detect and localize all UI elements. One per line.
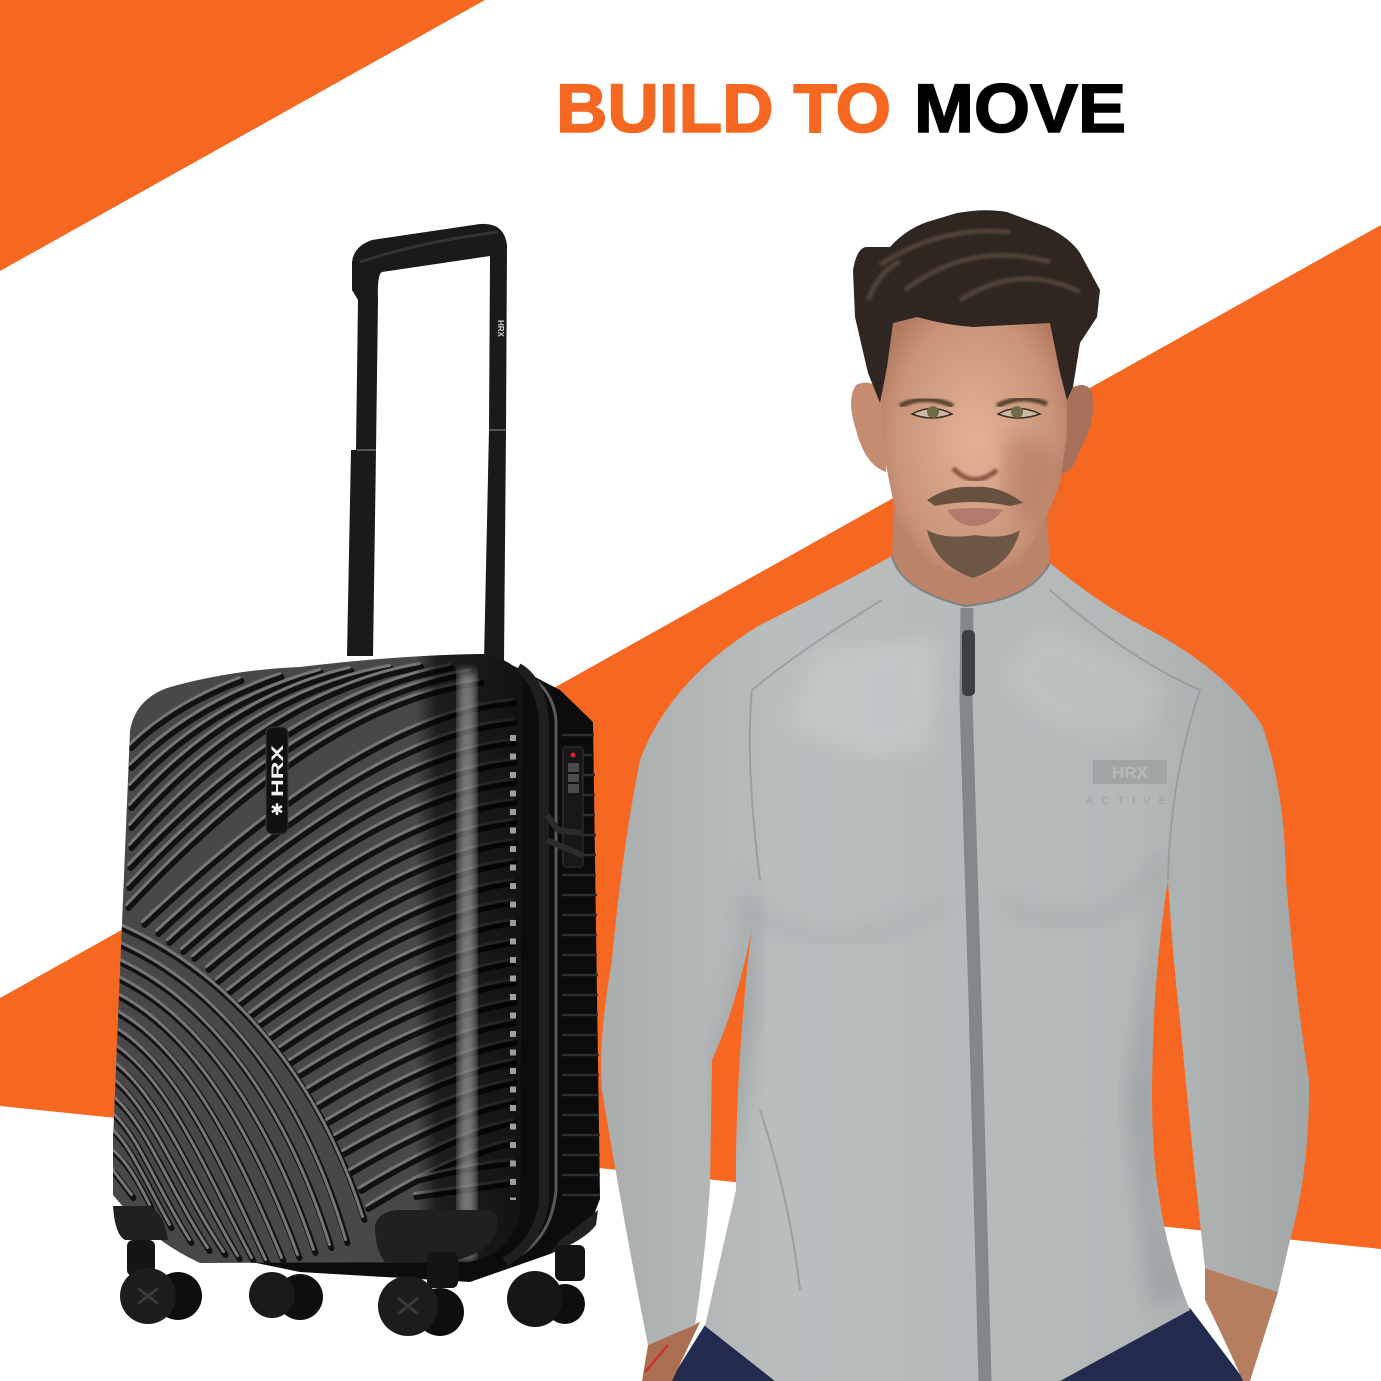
telescopic handle: HRX (496, 320, 505, 338)
front shell (100, 640, 530, 1280)
title: MOVE (914, 70, 1126, 147)
face (882, 300, 1067, 579)
raglan seams (750, 590, 1200, 1290)
moustache and beard (927, 487, 1023, 578)
man (601, 210, 1309, 1381)
side ribbed panel and base (170, 664, 600, 1282)
chest logo: ACTIVE (1086, 795, 1174, 807)
brand badge: HRX (268, 744, 287, 797)
ears (851, 383, 1093, 473)
jacket shading (712, 620, 1190, 1310)
combination lock (547, 747, 583, 867)
nose (953, 415, 997, 480)
corner guards (113, 1206, 598, 1262)
brand badge: ✱ (270, 800, 284, 819)
navy trousers (670, 1308, 1245, 1381)
brand badge (266, 727, 288, 834)
eyes (912, 406, 1040, 418)
orange triangle top-left (0, 0, 485, 271)
title (556, 70, 1126, 147)
zipper (966, 608, 985, 1381)
eyebrows (900, 399, 1047, 406)
orange diagonal band (0, 225, 1381, 1249)
telescopic handle (347, 224, 507, 660)
grey jacket (601, 556, 1309, 1381)
hair (853, 210, 1100, 403)
suitcase (100, 224, 600, 1336)
chest logo: HRX (1112, 765, 1148, 782)
chest logo (1086, 760, 1174, 807)
glossy dark band (415, 650, 525, 1270)
hair highlights (868, 231, 1080, 300)
specular highlight (458, 670, 476, 1260)
title: BUILD TO (556, 70, 891, 147)
collar (892, 556, 1050, 606)
hands (642, 1268, 1278, 1381)
wheels (120, 1240, 585, 1336)
facial shading (1005, 438, 1058, 535)
zipper pull (962, 630, 975, 696)
neck (892, 510, 1050, 608)
lips (947, 508, 1003, 526)
